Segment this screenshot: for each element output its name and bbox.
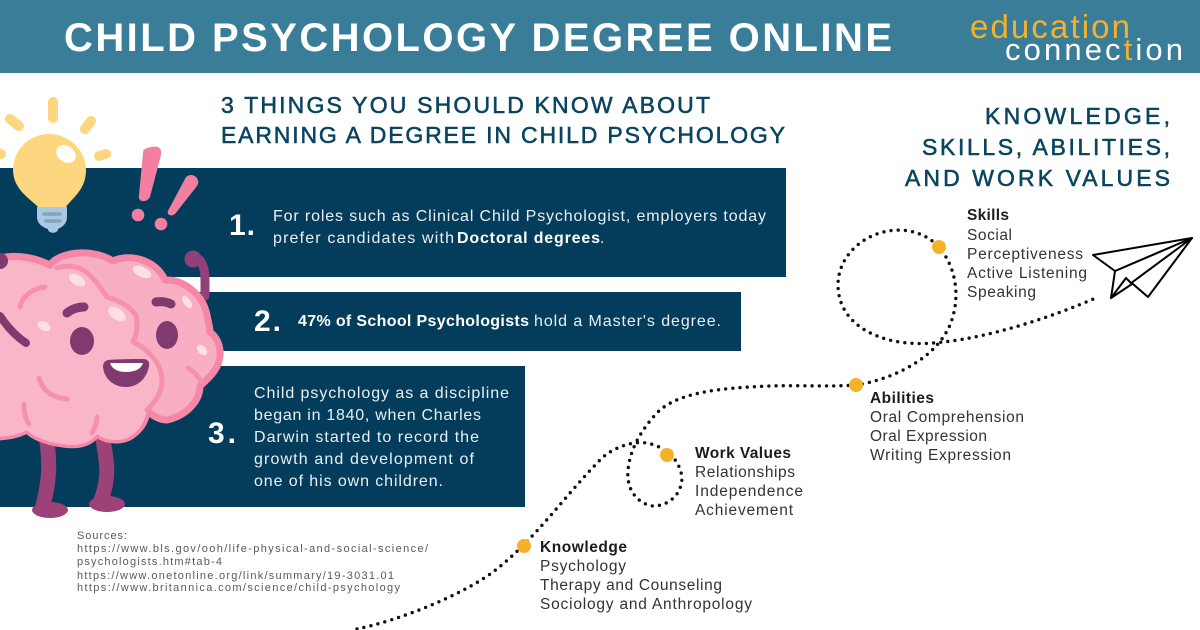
list: skills: Skills [967, 207, 1009, 224]
panel: fact 1: . [600, 230, 604, 247]
marker: work values [660, 448, 674, 462]
brain highlights [36, 263, 209, 357]
panel: fact 3 [0, 366, 525, 507]
brain arms [192, 256, 205, 296]
heading: 3 things: EARNING A DEGREE IN CHILD PSYCHOLOGY [221, 122, 785, 148]
panel: fact 2: 47% of School Psychologists [298, 313, 529, 330]
list: skills: Social [967, 227, 1012, 244]
panel: fact 2: hold a Master's degree. [534, 313, 721, 330]
panel: fact 2: 2. [254, 305, 281, 338]
sources: https://www.onetonline.org/link/summary/19-3031.01 [77, 570, 394, 582]
list: work values [660, 445, 803, 519]
panel: fact 1: For roles such as Clinical Child Psychologist, employers today [273, 208, 766, 225]
brain body [0, 253, 220, 445]
icon: paper plane [1093, 238, 1192, 298]
list: work values: Achievement [695, 502, 794, 519]
icon: light bulb [0, 102, 106, 233]
heading: knowledge, skills, abilities, and work values: AND WORK VALUES [905, 165, 1170, 191]
panel: fact 1: 1. [229, 209, 255, 242]
logo: education [970, 8, 1130, 45]
brain creases [20, 287, 201, 433]
panel: fact 3: growth and development of [254, 451, 475, 468]
panel: fact 2 [0, 292, 741, 351]
logo: connection [1005, 32, 1183, 67]
heading: knowledge, skills, abilities, and work values [905, 103, 1170, 191]
sources: https://www.bls.gov/ooh/life-physical-and-social-science/ [77, 543, 429, 555]
list: work values: Work Values [695, 445, 791, 462]
sources: Sources: [77, 530, 127, 542]
list: skills: Speaking [967, 284, 1036, 301]
list: abilities: Writing Expression [870, 447, 1011, 464]
brain face [0, 253, 178, 387]
list: knowledge: Therapy and Counseling [540, 577, 722, 594]
dotted flight path [357, 230, 1098, 629]
header banner [0, 0, 1200, 73]
list: knowledge: Sociology and Anthropology [540, 596, 752, 613]
panel: fact 3: Child psychology as a discipline [254, 385, 509, 402]
list: work values: Independence [695, 483, 803, 500]
list: skills [932, 207, 1087, 301]
panel: fact 1: prefer candidates with [273, 230, 454, 247]
list: abilities: Oral Expression [870, 428, 987, 445]
sources [77, 530, 429, 594]
marker: skills [932, 240, 946, 254]
icon: brain character [0, 250, 220, 518]
list: knowledge: Psychology [540, 558, 626, 575]
panel: fact 3: one of his own children. [254, 473, 443, 490]
list: skills: Active Listening [967, 265, 1087, 282]
panel: fact 1 [0, 168, 786, 277]
panel: fact 1: Doctoral degrees [457, 230, 600, 247]
front lobe [0, 262, 162, 445]
panel: fact 3: began in 1840, when Charles [254, 407, 481, 424]
heading: knowledge, skills, abilities, and work values: SKILLS, ABILITIES, [922, 134, 1170, 160]
list: knowledge: Knowledge [540, 539, 627, 556]
marker: abilities [849, 378, 863, 392]
logo [970, 8, 1183, 67]
list: abilities [849, 378, 1024, 464]
heading: 3 things: 3 THINGS YOU SHOULD KNOW ABOUT [221, 92, 710, 118]
list: abilities: Abilities [870, 390, 934, 407]
list: work values: Relationships [695, 464, 795, 481]
list: skills: Perceptiveness [967, 246, 1083, 263]
heading: knowledge, skills, abilities, and work values: KNOWLEDGE, [985, 103, 1170, 129]
sources: https://www.britannica.com/science/child-psychology [77, 582, 400, 594]
panel: fact 3: Darwin started to record the [254, 429, 479, 446]
brain legs [43, 435, 107, 505]
list: abilities: Oral Comprehension [870, 409, 1024, 426]
sources: psychologists.htm#tab-4 [77, 556, 222, 568]
panel: fact 3: 3. [208, 417, 236, 450]
heading: 3 things [221, 92, 785, 148]
marker: knowledge [517, 539, 531, 553]
icon: exclamation marks [132, 147, 198, 230]
list: knowledge [517, 539, 752, 613]
title: CHILD PSYCHOLOGY DEGREE ONLINE [64, 16, 892, 60]
